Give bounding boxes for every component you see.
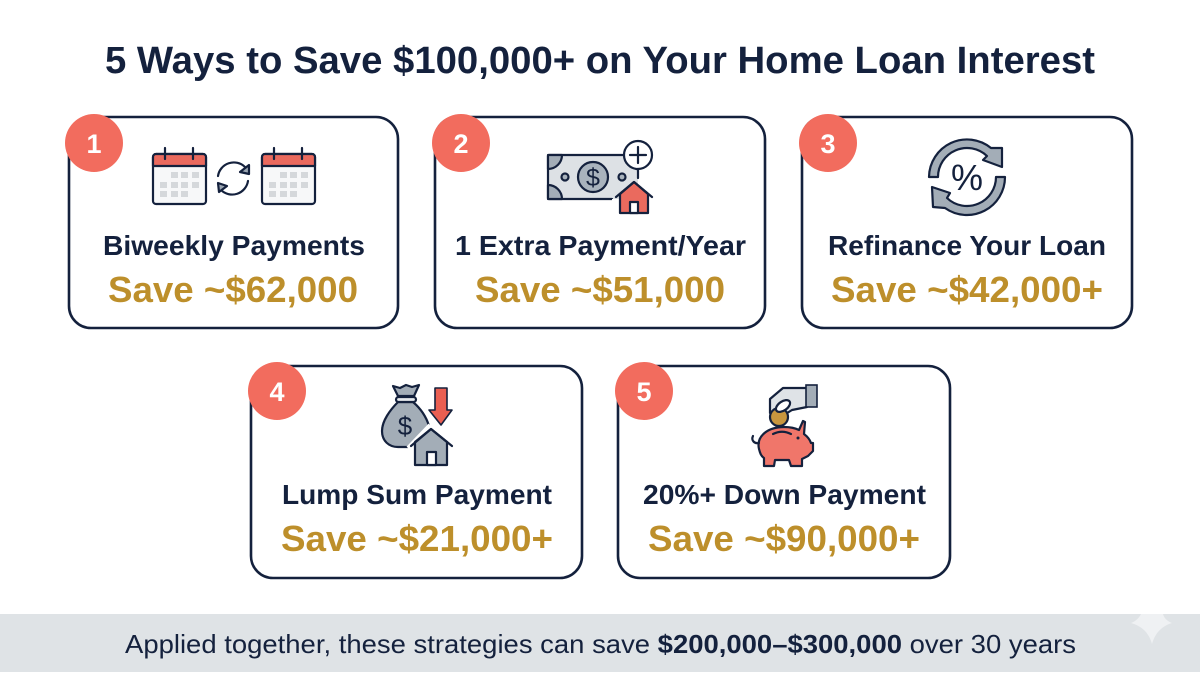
panel: biweekly payments — [65, 114, 398, 328]
panel: lump sum — [248, 362, 582, 578]
icon: money bag, down arrow and house — [382, 385, 452, 465]
icon: circular arrows with percent: % — [951, 157, 983, 198]
icon: banknote, plus and house — [548, 141, 654, 215]
badge 2: 2 — [453, 129, 469, 159]
badge 2 — [432, 114, 490, 172]
savings amount: Save ~$51,000 — [475, 269, 725, 310]
badge 4 — [248, 362, 306, 420]
icon: calendars with sync arrows — [153, 148, 315, 204]
panel: refinance — [799, 114, 1132, 328]
card heading: 1 Extra Payment/Year — [455, 230, 746, 261]
savings amount: Save ~$42,000+ — [831, 269, 1103, 310]
badge 5 — [615, 362, 673, 420]
footer banner — [0, 614, 1200, 672]
savings amount: Save ~$21,000+ — [281, 518, 553, 559]
icon: circular arrows with percent — [929, 139, 1005, 215]
icon: hand dropping coin into piggy bank — [752, 385, 817, 466]
badge 3 — [799, 114, 857, 172]
badge 1 — [65, 114, 123, 172]
card heading: Refinance Your Loan — [828, 230, 1106, 261]
icon: money bag, down arrow and house: $ — [398, 411, 413, 441]
badge 3: 3 — [820, 129, 836, 159]
savings amount: Save ~$62,000 — [108, 269, 358, 310]
sparkle mark — [1131, 614, 1172, 644]
panel: extra payment — [432, 114, 765, 328]
summary text: Applied together, these strategies can save $200,000–$300,000 over 30 years — [125, 629, 1076, 659]
badge 4: 4 — [269, 377, 285, 407]
icon: banknote, plus and house: $ — [586, 164, 600, 192]
title: 5 Ways to Save $100,000+ on Your Home Loan Interest — [105, 40, 1095, 82]
badge 1: 1 — [86, 129, 102, 159]
badge 5: 5 — [636, 377, 652, 407]
card heading: Lump Sum Payment — [282, 479, 552, 510]
panel: down payment — [615, 362, 950, 578]
savings amount: Save ~$90,000+ — [648, 518, 920, 559]
card heading: Biweekly Payments — [103, 230, 365, 261]
card heading: 20%+ Down Payment — [643, 479, 926, 510]
